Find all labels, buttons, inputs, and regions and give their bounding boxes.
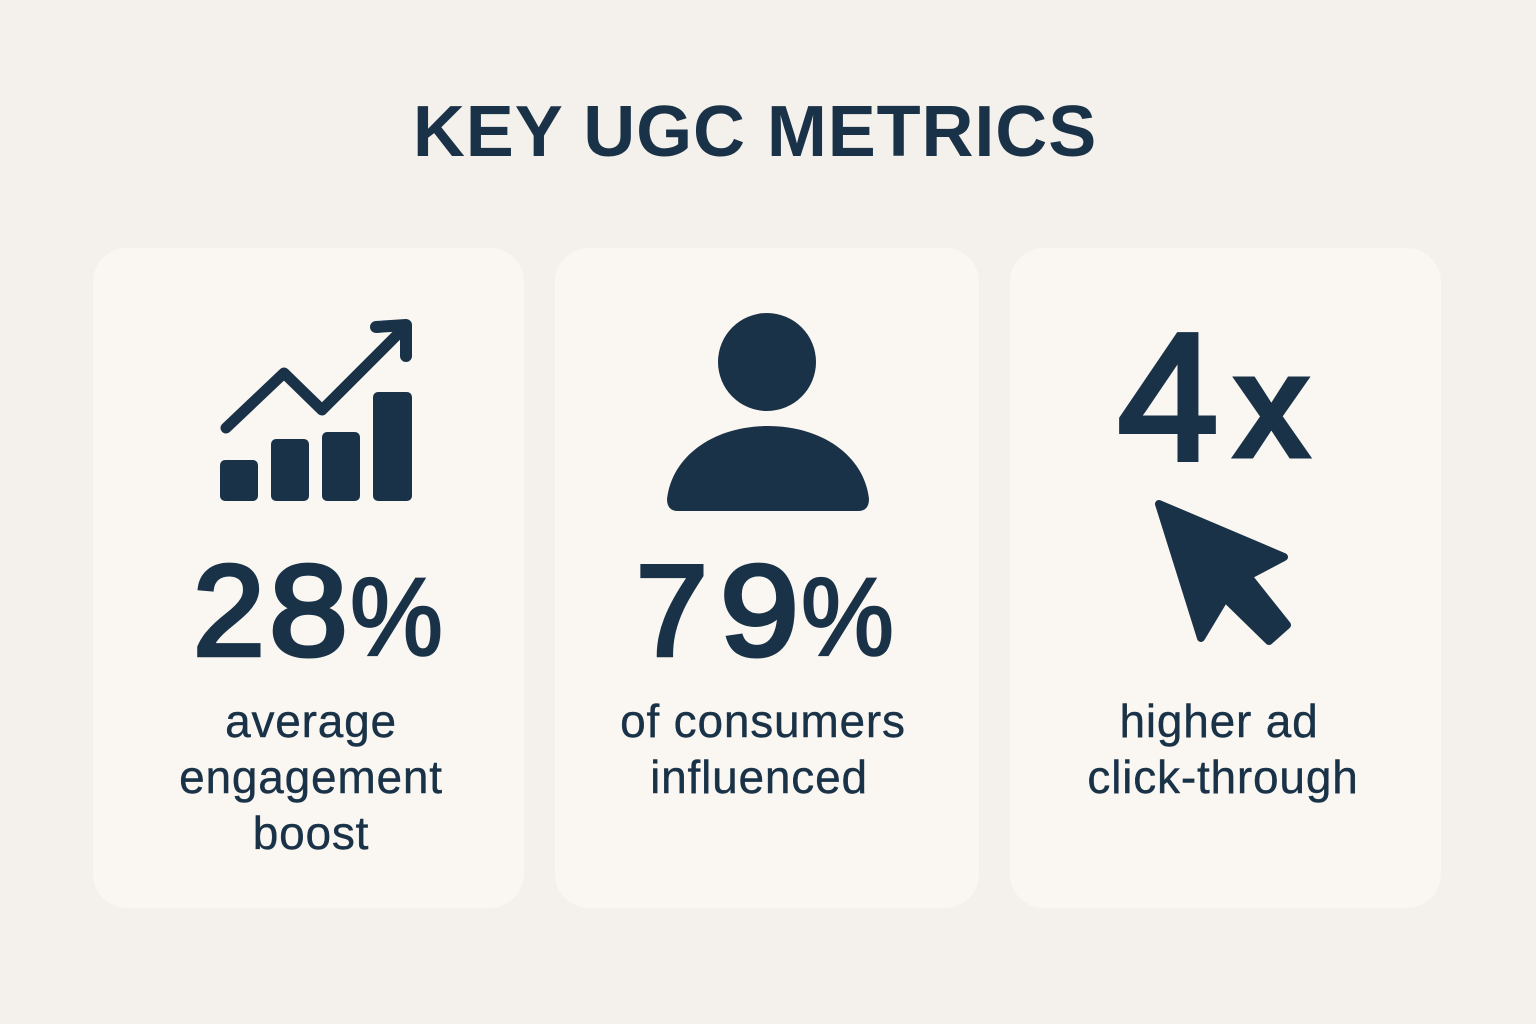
label: of consumers influenced: influenced [650, 751, 868, 803]
stat: 28%: 8 [269, 539, 348, 683]
panel: consumers [555, 248, 979, 908]
stat: 4x: x [1236, 327, 1307, 486]
label: higher ad click-through: higher ad [1119, 695, 1319, 747]
stat: 79%: % [800, 556, 893, 679]
label: higher ad click-through [1087, 695, 1359, 803]
label: of consumers influenced [620, 695, 906, 803]
title: KEY UGC METRICS [413, 92, 1097, 172]
label: average engagement boost: engagement [179, 751, 443, 803]
stat: 28% [193, 539, 442, 683]
label: higher ad click-through: click-through [1087, 751, 1359, 803]
stat: 28%: 2 [193, 539, 269, 683]
stat: 79%: 9 [720, 539, 799, 683]
panel: engagement [93, 248, 524, 908]
label: of consumers influenced: of consumers [620, 695, 906, 747]
stat: 79%: 7 [636, 539, 720, 683]
stat: 28%: % [350, 556, 442, 679]
label: average engagement boost [179, 695, 443, 859]
stat: 4x: 4 [1118, 297, 1218, 498]
label: average engagement boost: boost [253, 807, 369, 859]
label: average engagement boost: average [225, 695, 397, 747]
stat: 79% [636, 539, 893, 683]
panel: click-through [1010, 248, 1441, 908]
stat: 4x [1118, 297, 1312, 498]
